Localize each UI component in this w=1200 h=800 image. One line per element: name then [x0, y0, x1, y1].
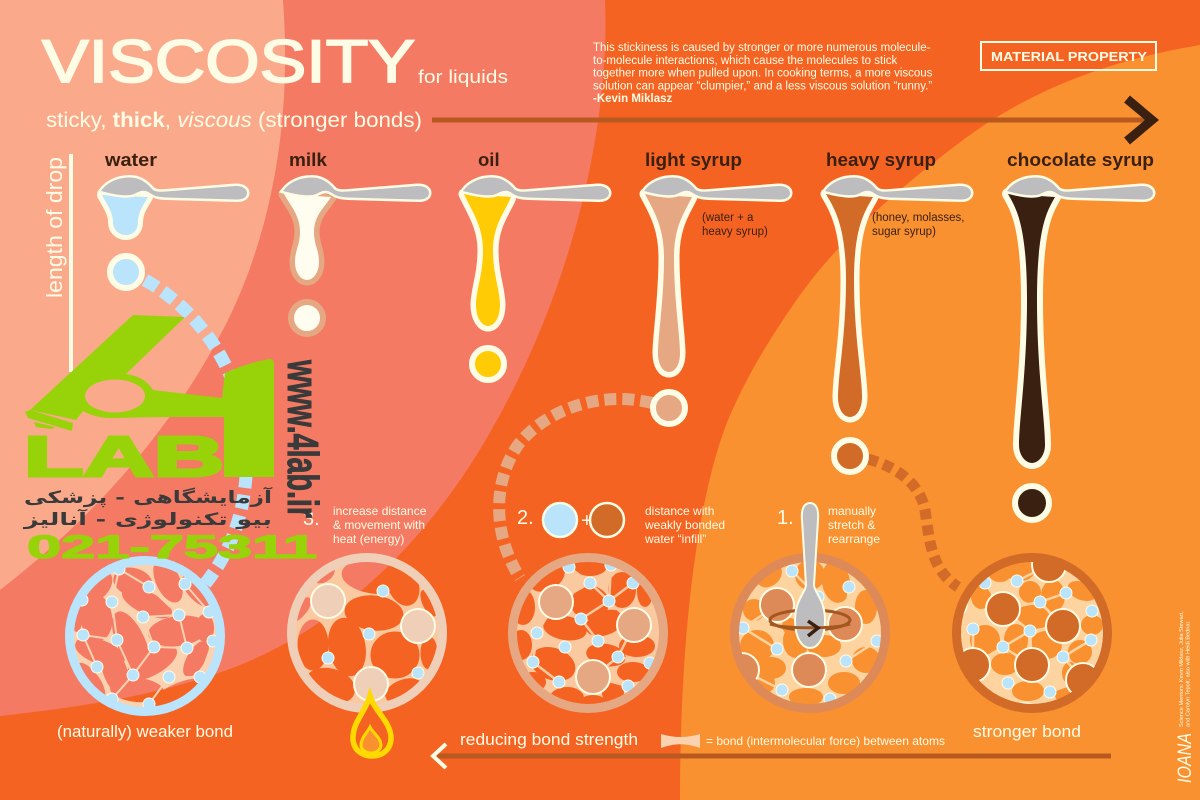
molecule circle: milk, heated [292, 558, 442, 708]
watermark logo: 4LAB [23, 315, 327, 565]
droplet: chocolate syrup [1015, 486, 1049, 520]
droplet: water [110, 256, 142, 288]
drop: oil [464, 194, 511, 326]
drop: water [102, 195, 148, 235]
note: heavy syrup: sugar syrup) [872, 226, 936, 238]
step 2 equation: 2. [517, 507, 534, 529]
step 1 text: rearrange [828, 532, 880, 546]
title: VISCOSITY [42, 28, 415, 95]
logo: lens stripes [25, 410, 73, 431]
spoon: chocolate syrup [1007, 178, 1153, 200]
viscosity axis arrow [432, 99, 1152, 141]
drop: chocolate syrup [1008, 194, 1055, 463]
credit: mentors: and Carolyn Tepolt; also with Heidi Bednar. [1186, 620, 1192, 727]
legend icon: bond [661, 734, 700, 748]
definition quote: -Kevin Miklasz [593, 93, 672, 105]
step 3 text: increase distance [333, 504, 427, 518]
step 3 text: heat (energy) [333, 532, 404, 546]
background: salmon curved band [0, 0, 605, 716]
badge: material property: MATERIAL PROPERTY [991, 49, 1147, 64]
step 2 equation [517, 503, 624, 537]
label: heavy syrup: heavy syrup [826, 149, 936, 170]
molecule circle: heavy syrup [725, 558, 886, 708]
note: light syrup: (water + a [702, 212, 754, 224]
label: stronger bond: stronger bond [973, 722, 1081, 741]
note: heavy syrup: (honey, molasses, [872, 212, 964, 224]
label: reducing bond strength: reducing bond strength [460, 730, 638, 749]
spoon: milk [283, 178, 429, 200]
credit: author: IOANA [1175, 733, 1196, 783]
step 2 text: water “infill” [644, 532, 706, 546]
step 1 text: manually [828, 504, 876, 518]
dashed path: light syrup [499, 399, 652, 578]
column: light syrup [644, 149, 790, 424]
spoon: water [101, 178, 247, 200]
step 1 number: 1. [777, 507, 794, 529]
definition quote: together more when pulled upon. In cooking terms, a more viscous [593, 68, 933, 80]
molecule circle: chocolate syrup, stronger bond [952, 553, 1112, 713]
logo: persian line one: آزمایشگاهی - پزشکی [24, 486, 274, 508]
column: oil [463, 149, 609, 380]
icon: stirring spoon [770, 503, 850, 648]
logo: phone number: 021-75311 [27, 529, 317, 565]
background: light orange curved band [680, 45, 1200, 800]
label: milk: milk [289, 149, 328, 170]
dashed path: heavy syrup [868, 459, 958, 587]
spoon: light syrup [644, 178, 790, 200]
label: light syrup: light syrup [645, 149, 742, 170]
column: water [101, 149, 247, 288]
background: light peach curved band [0, 0, 285, 590]
length of drop axis [69, 154, 73, 372]
badge: material property [981, 42, 1156, 70]
label: chocolate syrup: chocolate syrup [1007, 149, 1154, 170]
droplet: heavy syrup [834, 440, 866, 472]
column: chocolate syrup [1007, 149, 1154, 520]
drop: light syrup [645, 194, 692, 372]
definition quote: solution can appear “clumpier,” and a less viscous solution “runny.” [593, 80, 932, 92]
subtitle: for liquids [418, 67, 508, 87]
definition quote: This stickiness is caused by stronger or more numerous molecule- [593, 42, 931, 54]
bond strength arrow [433, 744, 1111, 768]
note: light syrup: heavy syrup) [702, 226, 768, 238]
step 2 text: weakly bonded [644, 518, 725, 532]
viscosity axis label: sticky, thick, viscous (stronger bonds) [46, 108, 422, 132]
length of drop label: length of drop [42, 157, 67, 298]
step 2 text: distance with [645, 504, 714, 518]
spoon: heavy syrup [825, 178, 971, 200]
logo: LAB wordmark: LAB [24, 425, 224, 489]
credit: mentors: Science Mentors: Kevin Miklasz, Julia Stewart, [1179, 611, 1185, 727]
icon: flame [353, 696, 391, 756]
drop: heavy syrup [826, 194, 873, 417]
label: weaker bond: (naturally) weaker bond [57, 722, 233, 741]
step 1 text: stretch & [828, 518, 875, 532]
drop: milk [284, 194, 331, 280]
logo: persian line two: بیو تکنولوژی - آنالیز [23, 508, 272, 530]
logo: microscope [30, 315, 274, 477]
label: water: water [104, 149, 157, 170]
step 2 equation: + [581, 510, 593, 532]
label: oil: oil [478, 149, 500, 170]
logo: website: www.4lab.ir [278, 359, 327, 518]
molecule circle: light syrup [512, 558, 664, 708]
column: heavy syrup [825, 149, 971, 472]
column: milk [283, 149, 429, 334]
definition quote: to-molecule interactions, which cause the molecules to stick [593, 55, 898, 67]
step 3 number: 3. [303, 508, 320, 530]
droplet: milk [291, 302, 323, 334]
droplet: oil [472, 348, 504, 380]
step 3 text: & movement with [333, 518, 425, 532]
dashed path: water [145, 280, 247, 590]
spoon: oil [463, 178, 609, 200]
molecule circle: water, weaker bond [70, 560, 220, 712]
droplet: light syrup [653, 392, 685, 424]
legend text: bond: = bond (intermolecular force) between atoms [706, 734, 945, 748]
